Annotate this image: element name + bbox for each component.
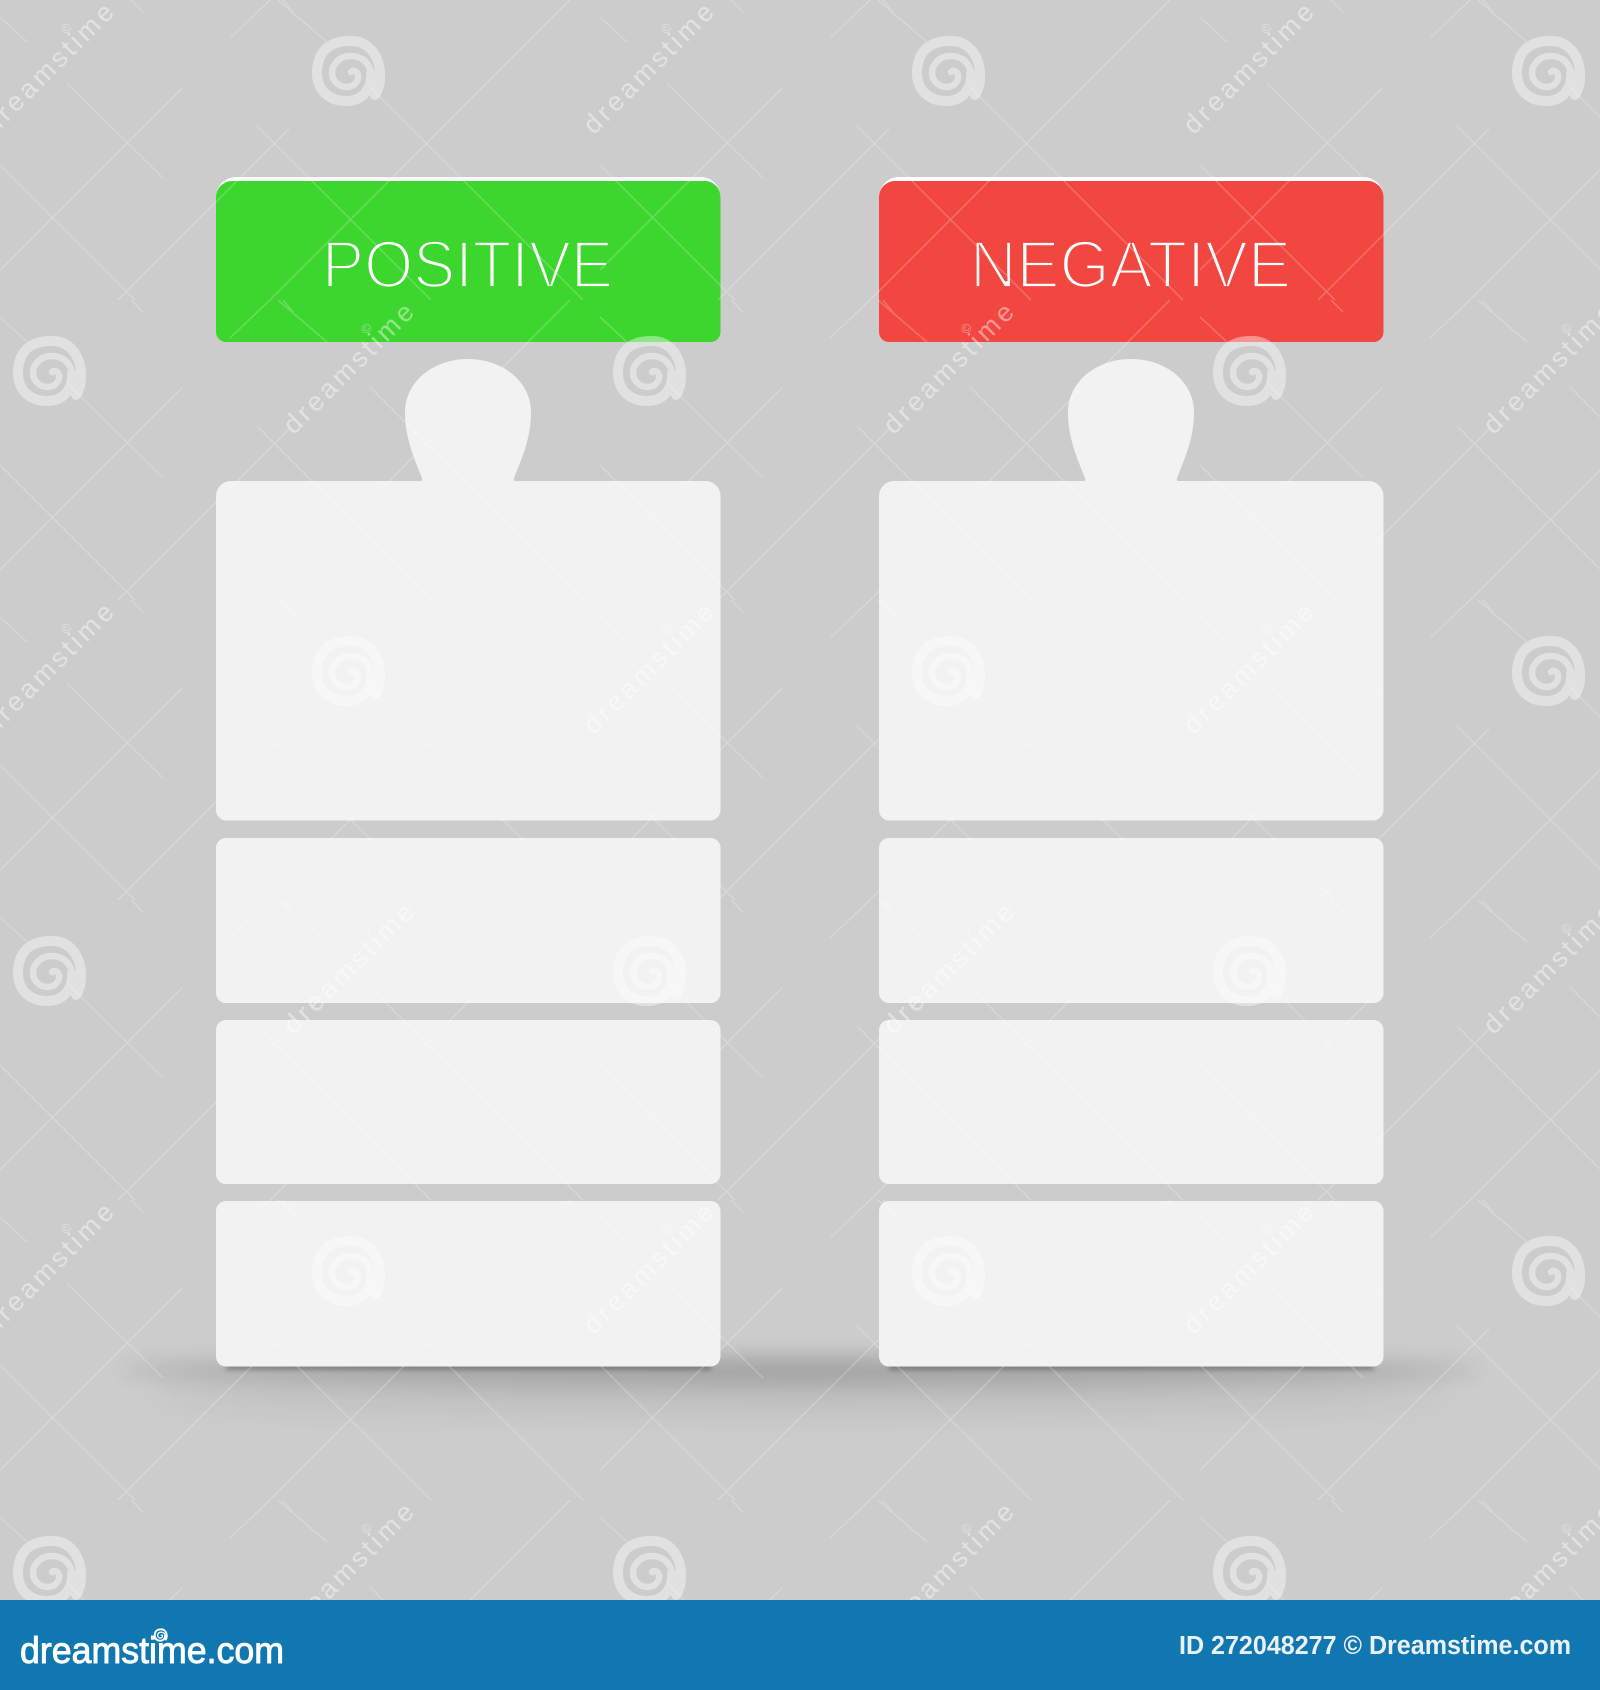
watermark: diagonal wordmarks: ©: [657, 1220, 675, 1237]
watermark: diagonal wordmarks: dreamstime: [877, 897, 1020, 1040]
watermark: diagonal wordmarks: dreamstime: [277, 297, 420, 440]
watermark: diagonal wordmarks: ©: [357, 1520, 375, 1537]
watermark: diagonal wordmarks: ©: [57, 20, 75, 37]
watermark: diagonal wordmarks: ©: [1257, 1220, 1275, 1237]
ground shadow: [120, 1357, 1480, 1410]
panel: negative column: [879, 177, 1384, 1366]
header: negative: [879, 177, 1384, 342]
watermark: diagonal wordmarks: ©: [357, 920, 375, 937]
panel: positive column: [216, 177, 720, 1366]
puzzle piece: positive top card: [216, 359, 720, 820]
watermark: diagonal wordmarks: ©: [657, 20, 675, 37]
watermark: diagonal wordmarks: ©: [1557, 920, 1575, 937]
watermark: diagonal wordmarks: dreamstime: [877, 1497, 1020, 1640]
watermark: diagonal wordmarks: ©: [657, 620, 675, 637]
card: positive row 3: [216, 1201, 720, 1366]
watermark: diagonal wordmarks: ©: [1557, 1520, 1575, 1537]
watermark: diagonal wordmarks: dreamstime: [577, 597, 720, 740]
watermark: diagonal wordmarks: dreamstime: [877, 297, 1020, 440]
watermark: diagonal wordmarks: ©: [957, 920, 975, 937]
watermark: diagonal wordmarks: dreamstime: [1177, 597, 1320, 740]
icon: small spiral: [155, 1629, 167, 1641]
card: negative row 3: [879, 1201, 1384, 1366]
watermark: diagonal wordmarks: dreamstime: [277, 1497, 420, 1640]
heading: negative: NEGATIVE: [970, 228, 1291, 302]
watermark: diagonal wordmarks: ©: [357, 320, 375, 337]
heading: positive: POSITIVE: [322, 228, 613, 302]
card: negative row 1: [879, 838, 1384, 1003]
watermark: diagonal wordmarks: dreamstime: [1177, 1197, 1320, 1340]
header: positive: [216, 177, 720, 342]
card: positive row 1: [216, 838, 720, 1003]
watermark: diagonal wordmarks: ©: [57, 1220, 75, 1237]
watermark: diagonal wordmarks: ©: [957, 320, 975, 337]
footer bar: [0, 1600, 1600, 1690]
watermark: diagonal wordmarks: ©: [1257, 20, 1275, 37]
footer logo: dreamstime.com: dreamstime.com: [20, 1630, 284, 1671]
watermark: diagonal wordmarks: dreamstime: [577, 0, 720, 140]
puzzle piece: negative top card: [879, 359, 1384, 820]
card: negative row 2: [879, 1020, 1384, 1184]
watermark: diagonal wordmarks: ©: [1257, 620, 1275, 637]
watermark: diagonal wordmarks: ©: [957, 1520, 975, 1537]
watermark: diagonal wordmarks: dreamstime: [277, 897, 420, 1040]
watermark: diagonal wordmarks: dreamstime: [1177, 0, 1320, 140]
watermark: diagonal wordmarks: ©: [1557, 320, 1575, 337]
watermark: diagonal wordmarks: dreamstime: [577, 1197, 720, 1340]
footer image id and credit: ID 272048277 © Dreamstime.com: [1179, 1632, 1571, 1660]
card: positive row 2: [216, 1020, 720, 1184]
watermark: diagonal wordmarks: ©: [57, 620, 75, 637]
